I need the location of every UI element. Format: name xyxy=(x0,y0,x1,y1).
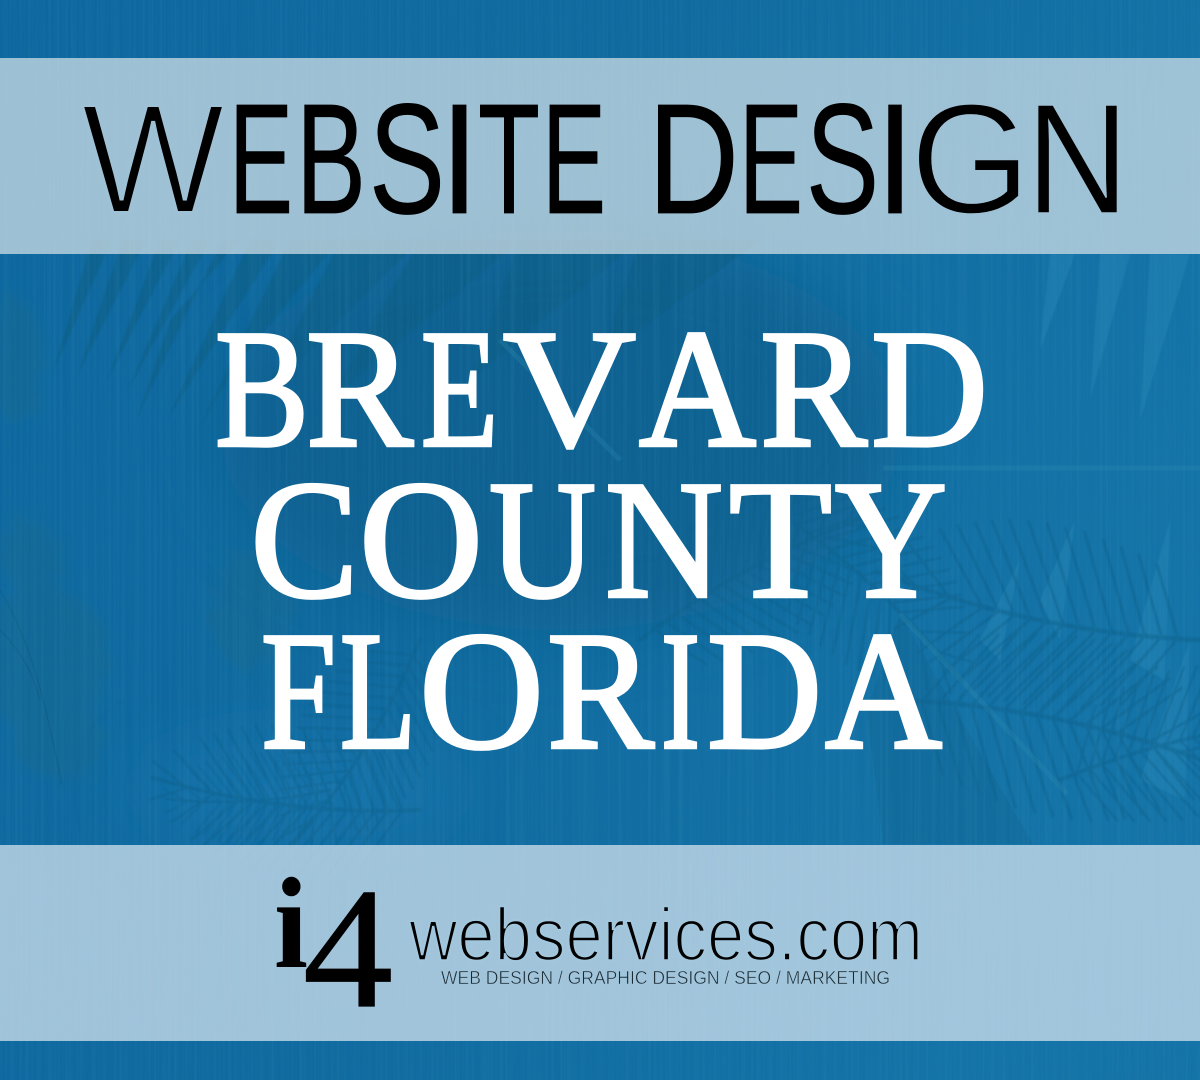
heading: Brevard County Florida: D xyxy=(871,294,988,482)
title: website design: I xyxy=(876,72,914,247)
logo wordmark: webservices.com xyxy=(408,892,923,976)
heading: Brevard County Florida: I xyxy=(661,596,700,784)
heading: Brevard County Florida: A xyxy=(825,596,942,784)
heading: Brevard County Florida: F xyxy=(261,596,336,784)
bottom banner band xyxy=(0,845,1200,1041)
heading: Brevard County Florida: R xyxy=(306,294,413,482)
title: website design: W xyxy=(81,72,225,247)
heading: Brevard County Florida: L xyxy=(340,596,416,784)
heading: Brevard County Florida: A xyxy=(639,294,756,482)
heading: Brevard County Florida: R xyxy=(760,294,867,482)
heading: Brevard County Florida: C xyxy=(250,446,358,634)
top left palm leaves xyxy=(53,240,760,426)
title: website design: E xyxy=(739,72,803,247)
left foliage xyxy=(0,300,290,780)
logo mark: i4: 4 xyxy=(303,854,393,1044)
heading: Brevard County Florida: V xyxy=(503,294,636,482)
heading: Brevard County Florida: B xyxy=(215,294,309,482)
title: website design: S xyxy=(369,72,445,247)
logo mark: i4: i xyxy=(274,852,308,996)
heading: Brevard County Florida: Y xyxy=(835,446,947,634)
heading: Brevard County Florida: R xyxy=(547,596,654,784)
title: website design: N xyxy=(1026,72,1129,247)
heading: Brevard County Florida xyxy=(215,294,988,784)
heading: Brevard County Florida: N xyxy=(605,446,723,634)
heading: Brevard County Florida: D xyxy=(707,596,822,784)
title: website design: I xyxy=(440,72,479,247)
heading: Brevard County Florida: O xyxy=(419,596,544,784)
title: website design: S xyxy=(806,72,879,247)
top banner band xyxy=(0,58,1200,254)
logo: i4 webservices xyxy=(274,852,923,1044)
logo tagline: WEB DESIGN / GRAPHIC DESIGN / SEO / MARKETING xyxy=(441,967,890,988)
heading: Brevard County Florida: U xyxy=(489,446,596,634)
heading: Brevard County Florida: E xyxy=(421,294,498,482)
title: website design: D xyxy=(648,72,739,247)
title: website design: E xyxy=(229,72,293,247)
title: website design: G xyxy=(910,72,1031,247)
heading: Brevard County Florida: O xyxy=(359,446,483,634)
title: website design: T xyxy=(478,72,540,247)
title: website design: B xyxy=(296,72,366,247)
right palm fronds xyxy=(144,439,1200,886)
title: website design: E xyxy=(542,72,606,247)
right sky gaps xyxy=(980,254,1190,800)
heading: Brevard County Florida: T xyxy=(729,446,832,634)
